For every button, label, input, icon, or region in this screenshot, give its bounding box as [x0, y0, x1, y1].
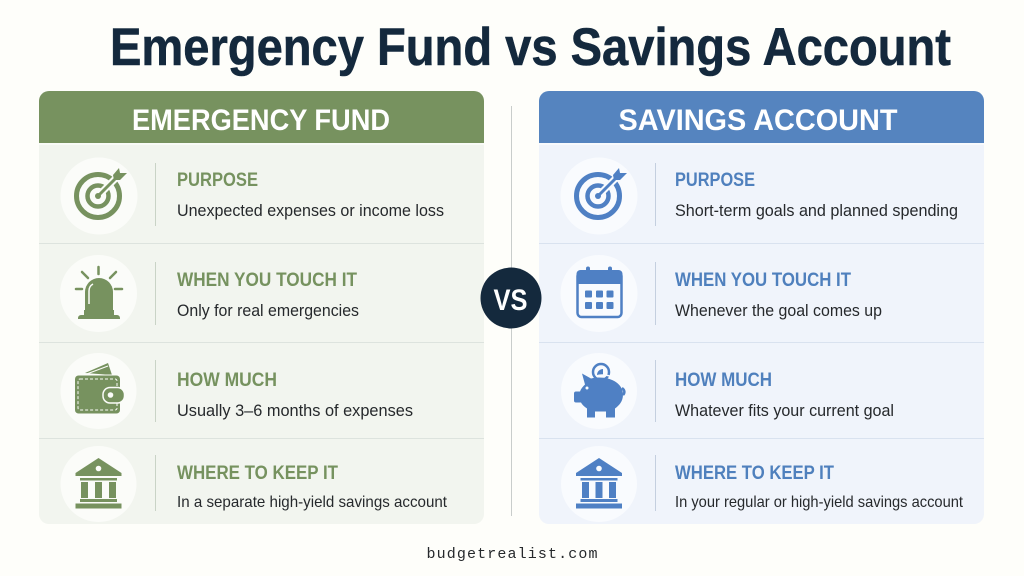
heading: where to keep it: WHERE TO KEEP IT: [177, 463, 338, 484]
text: where to keep it: In a separate high-yield savings account: [177, 494, 448, 511]
heading: how much: HOW MUCH: [177, 370, 277, 391]
icon: bank: [60, 446, 136, 522]
vs badge: [480, 268, 542, 328]
heading: how much: HOW MUCH: [675, 370, 772, 391]
heading: when you touch it: WHEN YOU TOUCH IT: [177, 270, 357, 291]
row: when you touch it: [60, 255, 359, 332]
icon: calendar: [560, 255, 638, 332]
panel: savings account: [539, 91, 984, 524]
text: when you touch it: Only for real emergencies: [177, 301, 359, 320]
panel header: emergency fund: [39, 91, 484, 143]
row: purpose: [560, 158, 958, 234]
footer: website: budgetrealist.com: [426, 546, 598, 563]
heading: purpose: PURPOSE: [177, 170, 258, 191]
row: where to keep it: [60, 446, 448, 522]
icon: wallet: [60, 353, 136, 429]
row: purpose: [60, 158, 444, 234]
row: how much: [60, 353, 413, 429]
heading: when you touch it: WHEN YOU TOUCH IT: [675, 270, 851, 291]
text: how much: Whatever fits your current goal: [675, 401, 894, 420]
text: how much: Usually 3–6 months of expenses: [177, 401, 413, 420]
icon: target: [560, 158, 638, 234]
text: purpose: Unexpected expenses or income loss: [177, 201, 444, 220]
text: where to keep it: In your regular or high-yield savings account: [675, 494, 964, 511]
row: when you touch it: [560, 255, 882, 332]
panel header: savings account: [539, 91, 984, 143]
icon: bank: [561, 446, 637, 522]
icon: siren: [60, 255, 137, 332]
text: purpose: Short-term goals and planned spending: [675, 201, 958, 220]
panel header: emergency fund: EMERGENCY FUND: [132, 104, 390, 137]
vs badge: VS: [494, 284, 528, 317]
row: where to keep it: [561, 446, 964, 522]
text: when you touch it: Whenever the goal comes up: [675, 301, 882, 320]
panel header: savings account: SAVINGS ACCOUNT: [618, 104, 898, 137]
heading: purpose: PURPOSE: [675, 170, 755, 191]
icon: piggy bank: [561, 353, 637, 429]
center divider: [511, 106, 512, 516]
icon: target: [60, 158, 138, 234]
heading: where to keep it: WHERE TO KEEP IT: [675, 463, 834, 484]
panel: emergency fund: [39, 91, 484, 524]
row: how much: [561, 353, 894, 429]
